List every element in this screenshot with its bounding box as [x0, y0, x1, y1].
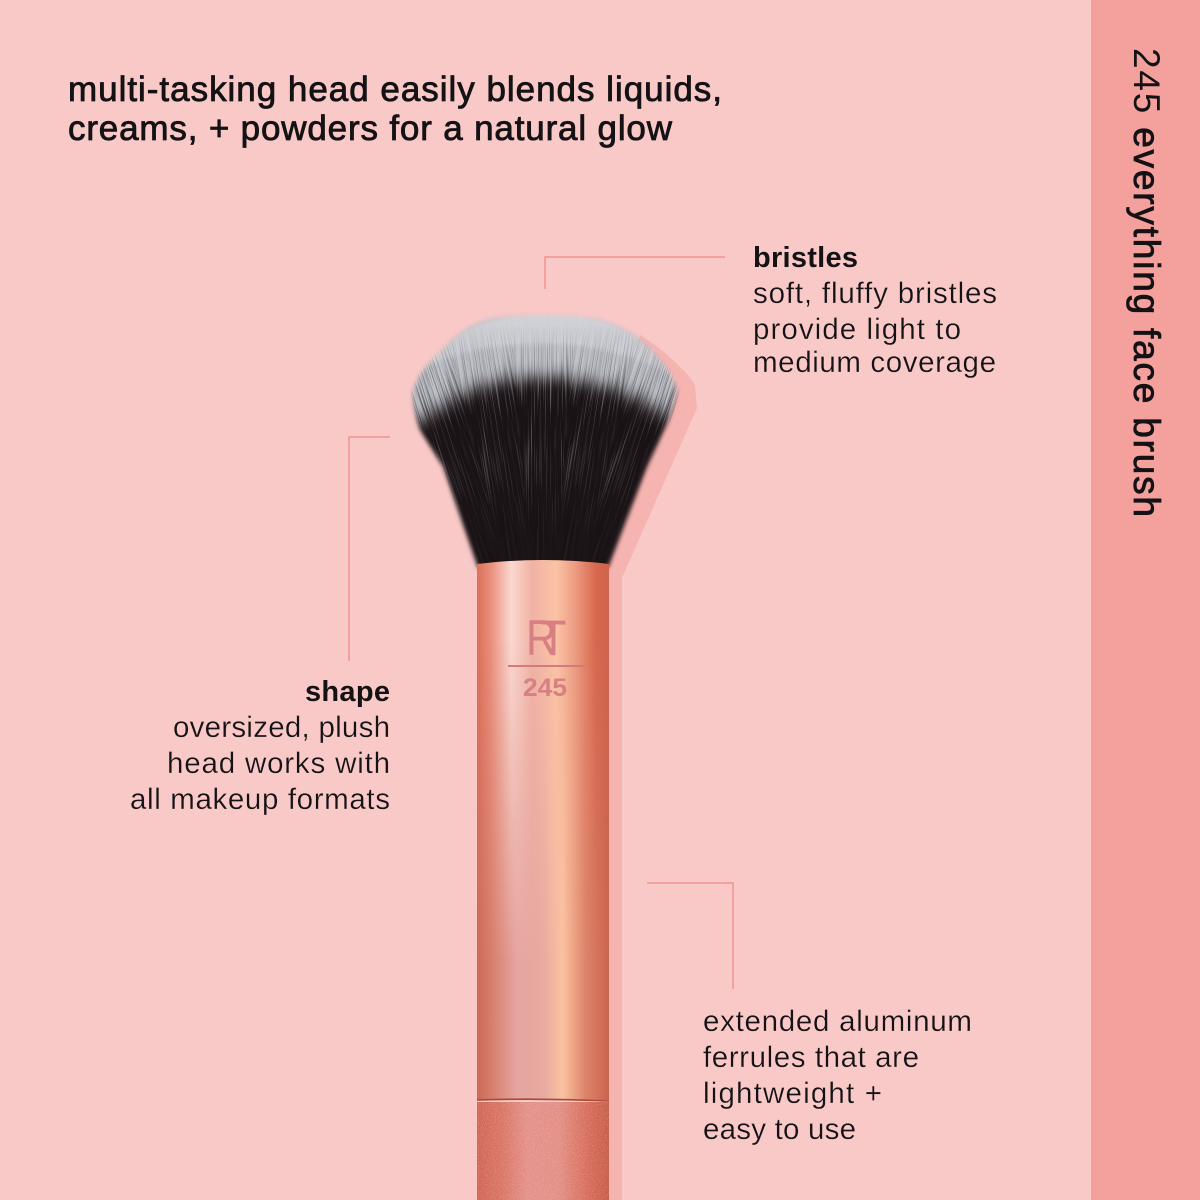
callout: bristles: provide light to	[753, 313, 961, 346]
callout: ferrules: lightweight +	[703, 1077, 882, 1110]
callout: ferrules	[703, 1005, 972, 1146]
ferrule logo: RT	[526, 610, 567, 666]
title: multi-tasking head easily blends liquids,	[68, 70, 722, 109]
ring line	[477, 1099, 609, 1101]
callout: bristles	[753, 242, 997, 379]
callout: shape: all makeup formats	[130, 783, 390, 816]
product name: 245 everything face brush	[1126, 48, 1167, 517]
light fibre streaks	[412, 344, 678, 563]
callout: bristles: soft, fluffy bristles	[753, 277, 997, 310]
callout: ferrules: easy to use	[703, 1113, 856, 1146]
ferrule logo	[508, 610, 585, 702]
grey bristle tips	[410, 312, 680, 432]
leader line: ferrules	[647, 883, 733, 989]
callout: shape: oversized, plush	[173, 711, 390, 744]
ferrule	[477, 560, 609, 1100]
ferrule logo: 245	[523, 674, 567, 702]
handle	[477, 1102, 609, 1200]
leader line: bristles	[545, 257, 725, 289]
brush shadow	[608, 335, 697, 1200]
brush	[410, 314, 680, 1200]
ferrule lower shading	[477, 683, 602, 1100]
handle speckle	[477, 1102, 609, 1200]
callout: bristles: bristles	[753, 242, 858, 274]
side band	[1091, 0, 1200, 1200]
brush head	[410, 314, 680, 570]
leader line: shape	[349, 437, 390, 661]
callout: ferrules: extended aluminum	[703, 1005, 972, 1038]
callout: shape	[130, 676, 390, 816]
callout: shape: shape	[305, 676, 390, 708]
dark fibre streaks	[410, 330, 680, 433]
callout: bristles: medium coverage	[753, 346, 996, 379]
callout: shape: head works with	[167, 747, 390, 780]
title: creams, + powders for a natural glow	[68, 109, 673, 148]
callout: ferrules: ferrules that are	[703, 1041, 919, 1074]
title	[68, 70, 722, 148]
